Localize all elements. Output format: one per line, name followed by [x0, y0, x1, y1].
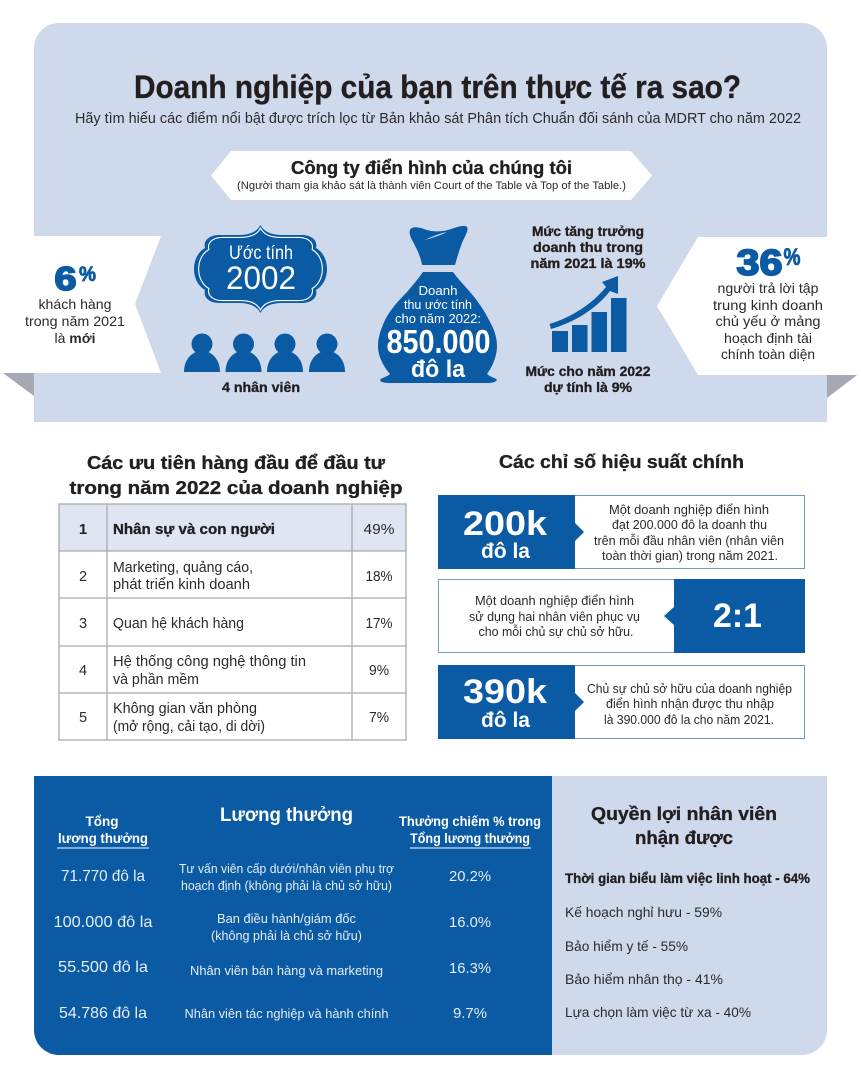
row 5: 7% — [369, 710, 389, 726]
callout: new clients: % — [79, 263, 96, 286]
callout: new clients: trong năm 2021 — [25, 313, 125, 329]
chart icon: rising bars and arrow — [550, 276, 626, 352]
icon: money bag with revenue — [378, 226, 497, 383]
row: junior advisers: Tư vấn viên cấp dưới/nhân viên phụ trợ — [179, 861, 394, 876]
banner: typical company heading: Công ty điển hình của chúng tôi — [291, 158, 572, 178]
KPI: owner income: Chủ sự chủ sở hữu của doanh nghiệp — [587, 681, 792, 696]
row: junior advisers: 71.770 đô la — [61, 868, 145, 885]
KPI: staff ratio: Một doanh nghiệp điển hình — [475, 593, 634, 608]
row 1 — [79, 521, 395, 538]
callout: financial planning focus: trung kinh doanh — [713, 297, 823, 313]
row 4: Hệ thống công nghệ thông tin — [113, 654, 306, 670]
text: revenue growth 2022 — [526, 363, 651, 395]
KPI: staff ratio — [438, 579, 805, 653]
icon: money bag with revenue: đô la — [411, 356, 466, 383]
row: executives: (không phải là chủ sở hữu) — [211, 928, 362, 943]
row 4 — [79, 654, 389, 688]
KPI: revenue per employee: đô la — [481, 540, 530, 563]
row 3: Quan hệ khách hàng — [113, 616, 244, 632]
list: benefits: Bảo hiểm nhân thọ - 41% — [565, 971, 723, 987]
row 2: Marketing, quảng cáo, — [113, 560, 253, 576]
heading: investment priorities — [70, 452, 402, 498]
list: benefits — [565, 870, 811, 1020]
column header: bonus share — [399, 813, 541, 848]
row 3 — [79, 616, 393, 632]
subtitle: Hãy tìm hiểu các điểm nổi bật được trích lọc từ Bản khảo sát Phân tích Chuẩn đối sánh của MDRT cho năm 2022 — [75, 110, 801, 127]
KPI: owner income: là 390.000 đô la cho năm 2021. — [604, 712, 774, 727]
heading: investment priorities: trong năm 2022 của doanh nghiệp — [70, 477, 402, 498]
KPI: revenue per employee: 200k — [463, 505, 547, 543]
callout: financial planning focus — [657, 237, 861, 405]
text: revenue growth 2021: Mức tăng trưởng — [532, 223, 644, 239]
column header: total compensation: lương thưởng — [58, 830, 148, 846]
table: investment priorities — [59, 504, 406, 740]
badge: founded 2002 — [194, 225, 327, 313]
row: operations and admin: 54.786 đô la — [59, 1005, 147, 1022]
icon: money bag with revenue: Doanh — [418, 283, 458, 298]
row 4: 4 — [79, 663, 87, 679]
banner: typical company heading — [211, 151, 652, 200]
row 5: 5 — [79, 710, 87, 726]
banner: typical company heading: (Người tham gia khảo sát là thành viên Court of the Table và Top of the Table.) — [237, 180, 626, 192]
row: sales and marketing — [58, 959, 491, 978]
badge: founded 2002: 2002 — [226, 260, 296, 296]
KPI: revenue per employee — [438, 495, 804, 569]
KPI: revenue per employee: đạt 200.000 đô la doanh thu — [612, 517, 767, 532]
row: operations and admin: 9.7% — [453, 1005, 487, 1022]
callout: financial planning focus: chính toàn diện — [721, 346, 815, 362]
KPI: owner income: điển hình nhận được thu nhập — [606, 696, 774, 711]
heading: key performance indicators: Các chỉ số hiệu suất chính — [499, 451, 744, 472]
list: benefits: Lựa chọn làm việc từ xa - 40% — [565, 1004, 751, 1020]
row 5 — [79, 701, 389, 735]
KPI: revenue per employee: Một doanh nghiệp điển hình — [609, 502, 769, 517]
row 5: (mở rộng, cải tạo, di dời) — [113, 719, 265, 735]
title: Doanh nghiệp của bạn trên thực tế ra sao? — [134, 69, 741, 105]
text: revenue growth 2021: doanh thu trong — [533, 239, 643, 255]
heading: benefits: Quyền lợi nhân viên — [591, 803, 777, 824]
KPI: staff ratio: 2:1 — [713, 597, 762, 635]
row 2 — [79, 560, 393, 593]
row: executives: Ban điều hành/giám đốc — [217, 911, 356, 926]
column header: bonus share: Tổng lương thưởng — [410, 830, 530, 846]
row: executives: 100.000 đô la — [54, 914, 153, 931]
heading: benefits — [591, 803, 777, 848]
heading: benefits: nhận được — [635, 827, 733, 848]
KPI: owner income: 390k — [463, 673, 547, 711]
callout: financial planning focus: người trả lời tập — [718, 280, 819, 296]
icons: four employees — [184, 334, 345, 372]
row: sales and marketing: Nhân viên bán hàng và marketing — [190, 963, 383, 978]
row 3: 17% — [366, 616, 393, 632]
text: revenue growth 2021 — [530, 223, 646, 271]
row 3: 3 — [79, 616, 87, 632]
callout: financial planning focus: 36 — [736, 242, 782, 283]
column header: total compensation: Tổng — [86, 813, 118, 829]
column header: total compensation — [57, 813, 149, 848]
row 4: và phần mềm — [113, 672, 199, 688]
list: benefits: Bảo hiểm y tế - 55% — [565, 938, 688, 954]
text: revenue growth 2022: dự tính là 9% — [544, 379, 633, 395]
row: sales and marketing: 55.500 đô la — [58, 959, 148, 976]
row: junior advisers — [61, 861, 491, 893]
row: junior advisers: hoạch định (không phải là chủ sở hữu) — [181, 878, 392, 893]
callout: new clients: là mới — [54, 330, 96, 346]
icon: money bag with revenue: 850.000 — [386, 323, 490, 360]
KPI: owner income — [438, 665, 804, 739]
panel: employee benefits — [552, 776, 827, 1055]
heading: investment priorities: Các ưu tiên hàng đầu để đầu tư — [87, 452, 386, 473]
icon: money bag with revenue: thu ước tính — [404, 297, 472, 312]
row 4: 9% — [369, 663, 389, 679]
KPI: revenue per employee: trên mỗi đầu nhân viên (nhân viên — [594, 533, 784, 548]
callout: new clients: 6 — [54, 260, 76, 297]
callout: financial planning focus: hoạch định tài — [724, 330, 812, 346]
row: junior advisers: 20.2% — [449, 868, 491, 885]
badge: founded 2002: Ước tính — [229, 243, 293, 264]
row 2: phát triển kinh doanh — [113, 577, 250, 593]
KPI: revenue per employee: toàn thời gian) trong năm 2021. — [602, 548, 778, 563]
text: revenue growth 2021: năm 2021 là 19% — [530, 255, 646, 271]
row 1: 49% — [364, 522, 395, 538]
panel: compensation — [34, 776, 552, 1055]
label: employees: 4 nhân viên — [222, 379, 300, 395]
row 1: 1 — [79, 521, 87, 538]
text: revenue growth 2022: Mức cho năm 2022 — [526, 363, 651, 379]
KPI: staff ratio: cho mỗi chủ sự chủ sở hữu. — [478, 624, 634, 639]
row: operations and admin — [59, 1005, 487, 1022]
row: sales and marketing: 16.3% — [449, 960, 491, 977]
list: benefits: Kế hoạch nghỉ hưu - 59% — [565, 904, 722, 920]
list: benefits: Thời gian biểu làm việc linh hoạt - 64% — [565, 870, 811, 886]
callout: new clients: khách hàng — [38, 296, 112, 312]
row: operations and admin: Nhân viên tác nghiệp và hành chính — [184, 1006, 388, 1021]
callout: financial planning focus: chủ yếu ở mảng — [716, 313, 820, 329]
column header: bonus share: Thưởng chiếm % trong — [399, 813, 541, 829]
row 2: 2 — [79, 569, 87, 585]
icon: money bag with revenue: cho năm 2022: — [395, 311, 481, 326]
row: executives: 16.0% — [449, 914, 491, 931]
row 5: Không gian văn phòng — [113, 701, 257, 717]
callout: financial planning focus: % — [784, 244, 800, 271]
KPI: staff ratio: sử dụng hai nhân viên phục vụ — [469, 609, 640, 624]
row: executives — [54, 911, 491, 943]
row 1: Nhân sự và con người — [113, 521, 275, 538]
panel: typical company — [0, 23, 861, 422]
row 2: 18% — [366, 569, 393, 585]
column header: compensation: Lương thưởng — [220, 805, 353, 826]
KPI: owner income: đô la — [481, 709, 530, 732]
callout: new clients — [0, 236, 161, 396]
